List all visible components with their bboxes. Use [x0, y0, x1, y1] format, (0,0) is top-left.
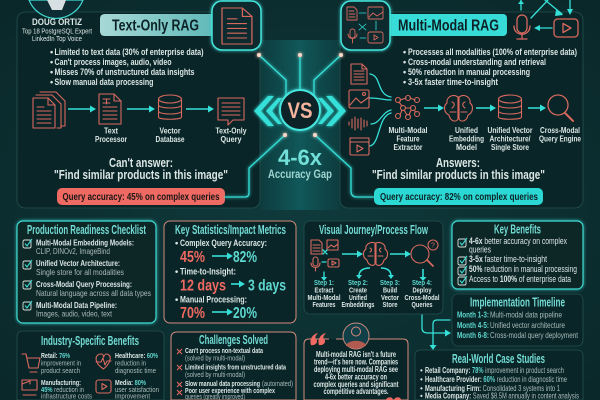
- accuracy gap: 4-6x: [278, 145, 323, 170]
- heading: Multi-Modal RAG: Multi-Modal RAG: [398, 18, 499, 34]
- presenter name: LinkedIn Top Voice: [32, 34, 82, 43]
- panel: key benefits: [452, 221, 583, 289]
- panel: industry-specific benefits: Industry-Specific Benefits: [41, 334, 139, 348]
- step labels: Unified: [349, 293, 367, 302]
- limitations list: •: [50, 57, 53, 67]
- icon: vector database: [158, 95, 182, 119]
- presenter name: DOUG ORTIZ: [32, 17, 82, 28]
- accuracy badge 45%: Query accuracy: 45% on complex queries: [62, 192, 220, 203]
- pipeline labels: [388, 126, 581, 152]
- quote text: Multi-modal RAG isn't a future: [316, 350, 396, 359]
- VS badge: [254, 90, 346, 130]
- benefit items: Access to 100% of enterprise data: [469, 274, 571, 284]
- capabilities list: 3-5x faster time-to-insight: [408, 77, 498, 87]
- panel: multi-modal RAG: [340, 0, 583, 208]
- timeline rows: Multi-modal data pipeline: [490, 310, 562, 320]
- pipeline labels: Embedding: [449, 134, 484, 144]
- pipeline: multi-modal: [349, 64, 581, 155]
- benefit: media: user satisfaction: [115, 385, 159, 394]
- step labels: Step 4:: [412, 278, 432, 287]
- case study rows: •: [420, 375, 423, 384]
- panel: challenges solved: [171, 332, 296, 400]
- step labels: Step 1:: [314, 278, 334, 287]
- pipeline labels: Single Store: [491, 143, 529, 152]
- capabilities list: 50% reduction in manual processing: [408, 67, 530, 77]
- pipeline labels: Query: [220, 135, 242, 144]
- panel: real-world case studies: [415, 350, 583, 400]
- step labels: [308, 278, 440, 309]
- step labels: Multi-Modal: [308, 293, 340, 302]
- pipeline labels: Architecture/: [490, 134, 531, 144]
- benefit: healthcare: [96, 351, 158, 375]
- checklist items: Single store for all modalities: [36, 267, 124, 277]
- limitations list: •: [50, 67, 53, 77]
- quote text: [314, 350, 399, 396]
- capabilities list: •: [403, 47, 406, 57]
- presenter name: Top 18 PostgreSQL Expert: [22, 26, 92, 36]
- limitations list: Can't process images, audio, video: [54, 57, 172, 67]
- limitations list: Limited to text data (30% of enterprise data): [54, 47, 204, 57]
- benefit: retail: improvement in: [41, 358, 81, 368]
- icon: brain: [363, 242, 388, 265]
- benefit: manufacturing: [22, 378, 92, 400]
- step labels: Create: [349, 286, 367, 294]
- panel: text-only RAG: [17, 0, 261, 208]
- pipeline labels: Database: [156, 135, 185, 144]
- pipeline labels: Model: [456, 143, 477, 152]
- metric: manual processing: [175, 294, 257, 322]
- timeline rows: Month 6-8:: [457, 330, 489, 340]
- limitations list: Misses 70% of unstructured data insights: [54, 67, 194, 77]
- pipeline labels: [95, 126, 247, 144]
- pipeline labels: Unified: [455, 126, 478, 135]
- metric: query accuracy: [175, 238, 267, 266]
- limitations list: •: [50, 77, 53, 87]
- benefit: healthcare: reduction in: [115, 358, 146, 368]
- quote text: deploying multi-modal RAG see: [314, 365, 398, 374]
- benefit: manufacturing: 45% reduction in: [41, 385, 84, 394]
- quote text: complex queries and significant: [314, 380, 399, 389]
- challenge items: [177, 346, 293, 400]
- case study rows: •: [420, 384, 423, 393]
- challenge items: (automated): [262, 379, 293, 388]
- step labels: Embeddings: [342, 300, 374, 309]
- capabilities list: •: [403, 57, 406, 67]
- metric: manual processing: 70%: [180, 305, 205, 322]
- icon: modalities: [311, 240, 339, 271]
- checklist items: Unified Vector Architecture:: [36, 258, 120, 268]
- step labels: Vector: [381, 293, 399, 302]
- pipeline: text-only: [33, 92, 247, 144]
- case study rows: [420, 366, 579, 400]
- icon: modalities box: [341, 1, 390, 50]
- icon: feature extractor: [396, 96, 420, 120]
- modality links: [322, 250, 327, 278]
- benefit items: queries: [469, 244, 491, 254]
- panel: key statistics: Key Statistics/Impact Metrics: [175, 223, 286, 237]
- metric: manual processing: Manual Processing:: [180, 294, 247, 304]
- icon: query document: [218, 98, 244, 125]
- challenge items: Limited insights from unstructured data: [185, 362, 287, 372]
- benefit: retail: Retail: 76%: [41, 351, 70, 360]
- step labels: Deploy: [412, 286, 432, 294]
- panel: challenges solved: Challenges Solved: [199, 333, 268, 347]
- icon: closing quote mark: [386, 397, 401, 400]
- quote text: trend—it's here now. Companies: [314, 358, 398, 366]
- metric: query accuracy: 82%: [233, 249, 257, 266]
- timeline rows: [457, 310, 579, 340]
- pipeline labels: Extractor: [394, 143, 422, 152]
- benefit: healthcare: diagnostic time: [115, 366, 156, 375]
- challenge items: (solved by multi-modal): [185, 354, 245, 362]
- case study rows: Healthcare Provider: 60% reduction in diagnostic time: [425, 375, 567, 384]
- icon: opening quote mark: [310, 333, 326, 345]
- panel: implementation timeline: [452, 294, 583, 346]
- pipeline labels: Processor: [95, 135, 127, 144]
- avatar: [343, 323, 369, 349]
- panel: production readiness checklist: [17, 221, 156, 323]
- accuracy gap: Accuracy Gap: [268, 169, 332, 181]
- icons: input modalities: [349, 64, 369, 155]
- connector arrows: [422, 315, 451, 350]
- icon: brain: [445, 96, 472, 121]
- panel: real-world case studies: Real-World Case Studies: [452, 352, 545, 366]
- top-right modality icons: [514, 0, 578, 39]
- portrait: Doug Ortiz: [29, 0, 83, 18]
- accuracy gap: [268, 145, 332, 181]
- metric: query accuracy: •: [175, 238, 178, 248]
- panel: key statistics: [164, 221, 296, 323]
- challenge items: (solved by multi-modal): [185, 370, 245, 379]
- panel: visual journey: [304, 221, 443, 314]
- metric: time to insight: Time-to-Insight:: [180, 266, 236, 276]
- timeline rows: Unified vector architecture: [490, 320, 565, 330]
- pipeline labels: Multi-Modal: [388, 126, 428, 135]
- capabilities list: •: [403, 67, 406, 77]
- accuracy badge 82%: [374, 188, 543, 205]
- step labels: Features: [312, 300, 336, 309]
- question mark: ?: [431, 242, 435, 250]
- step labels: Step 2:: [348, 278, 368, 287]
- pipeline labels: Query Engine: [539, 134, 581, 144]
- arrows: [68, 106, 214, 112]
- metric: time to insight: 12 days: [180, 278, 226, 294]
- case study rows: Manufacturing Firm: Consolidated 3 systems into 1: [425, 384, 560, 393]
- panel: production readiness checklist: Production Readiness Checklist: [27, 223, 147, 237]
- icon: magnifier with question: [411, 240, 438, 266]
- heading: Text-Only RAG: Text-Only RAG: [112, 18, 199, 34]
- metric: manual processing: •: [175, 294, 178, 304]
- challenge items: Poor user experience with complex: [185, 386, 275, 395]
- presenter name: [22, 17, 92, 43]
- panel: key benefits: Key Benefits: [494, 222, 541, 236]
- flow lines into extractor: [370, 74, 391, 146]
- challenge items: Slow manual data processing: [185, 379, 260, 388]
- challenge items: Can't process non-textual data: [185, 346, 264, 355]
- process arrows: [321, 250, 426, 281]
- step labels: Cross-Modal: [404, 293, 440, 302]
- pipeline labels: Text: [104, 126, 118, 136]
- metric: query accuracy: Complex Query Accuracy:: [180, 238, 267, 248]
- icon: stacked documents: [33, 92, 65, 128]
- metric: time to insight: 3 days: [248, 278, 286, 294]
- metric: query accuracy: 45%: [180, 249, 205, 266]
- checklist items: Cross-Modal Query Processing:: [36, 279, 132, 289]
- capabilities list: Cross-modal understanding and retrieval: [408, 57, 546, 67]
- answer text: "Find similar products in this image": [372, 168, 545, 182]
- case study rows: •: [420, 366, 423, 375]
- benefit: retail: [22, 351, 81, 375]
- accuracy badge 82%: Query accuracy: 82% on complex queries: [380, 192, 538, 203]
- pipeline labels: Cross-Modal: [540, 126, 580, 135]
- icon: unified store: [498, 95, 522, 119]
- answer text: [372, 156, 545, 182]
- pipeline labels: Vector: [160, 126, 180, 136]
- benefit: manufacturing: Manufacturing:: [41, 378, 81, 387]
- accuracy badge 45%: [57, 188, 225, 205]
- timeline rows: Month 1-3:: [457, 310, 489, 320]
- circuit connectors: [225, 53, 374, 197]
- limitations list: [50, 47, 204, 87]
- quote text: competitive advantages.: [324, 387, 388, 396]
- case study rows: Retail Company: 78% improvement in product search: [425, 366, 564, 375]
- limitations list: •: [50, 47, 53, 57]
- benefit items: 4-6x better accuracy on complex: [469, 236, 567, 246]
- answer text: Answers:: [436, 156, 480, 170]
- metric: time to insight: •: [175, 266, 178, 276]
- benefit: media: [96, 378, 159, 400]
- heading: Text-Only RAG: [100, 14, 214, 36]
- arrows: [424, 104, 546, 112]
- icon: document box: [212, 1, 261, 50]
- icon: query engine: [548, 95, 573, 121]
- pipeline labels: Text-Only: [216, 126, 247, 136]
- VS badge: VS: [288, 98, 312, 123]
- checklist items: Images, audio, video, text: [36, 308, 112, 318]
- pipeline labels: Unified Vector: [488, 126, 532, 135]
- icon: text processor: [99, 94, 121, 124]
- step labels: Step 3:: [380, 278, 400, 287]
- step labels: Store: [382, 300, 398, 309]
- timeline rows: Month 4-5:: [457, 320, 489, 330]
- question text: Can't answer:: [109, 156, 173, 170]
- capabilities list: •: [403, 77, 406, 87]
- question text: [54, 156, 228, 182]
- benefit: media: Media: 80%: [115, 378, 146, 387]
- benefit: healthcare: Healthcare: 60%: [115, 351, 158, 360]
- checklist items: Natural language across all data types: [36, 288, 151, 298]
- metric: time to insight: [175, 266, 286, 294]
- step labels: Extract: [314, 286, 334, 294]
- capabilities list: [403, 47, 577, 87]
- panel: visual journey: Visual Journey/Process Flow: [319, 223, 428, 237]
- checklist items: Multi-Modal Embedding Models:: [36, 238, 134, 248]
- quote text: 4-6x better accuracy on: [325, 372, 387, 382]
- panel: quote: [304, 323, 408, 400]
- heading: Multi-Modal RAG: [386, 14, 507, 36]
- benefit items: 3-5x faster time-to-insight: [469, 254, 547, 264]
- checklist items: [23, 238, 151, 318]
- chevrons: [254, 96, 346, 126]
- step labels: Build: [383, 286, 397, 294]
- question text: "Find similar products in this image": [54, 168, 228, 182]
- limitations list: Slow manual data processing: [54, 77, 154, 87]
- panel: industry-specific benefits: [17, 331, 164, 400]
- central glow band: [260, 40, 340, 210]
- checklist items: CLIP, DINOv2, ImageBind: [36, 246, 110, 256]
- benefit: retail: product search: [41, 366, 80, 375]
- metric: manual processing: 20%: [233, 305, 257, 322]
- checklist items: Multi-Modal Data Pipeline:: [36, 300, 117, 310]
- step labels: Queries: [412, 300, 432, 309]
- pipeline labels: Feature: [396, 134, 420, 144]
- benefit items: [458, 236, 577, 285]
